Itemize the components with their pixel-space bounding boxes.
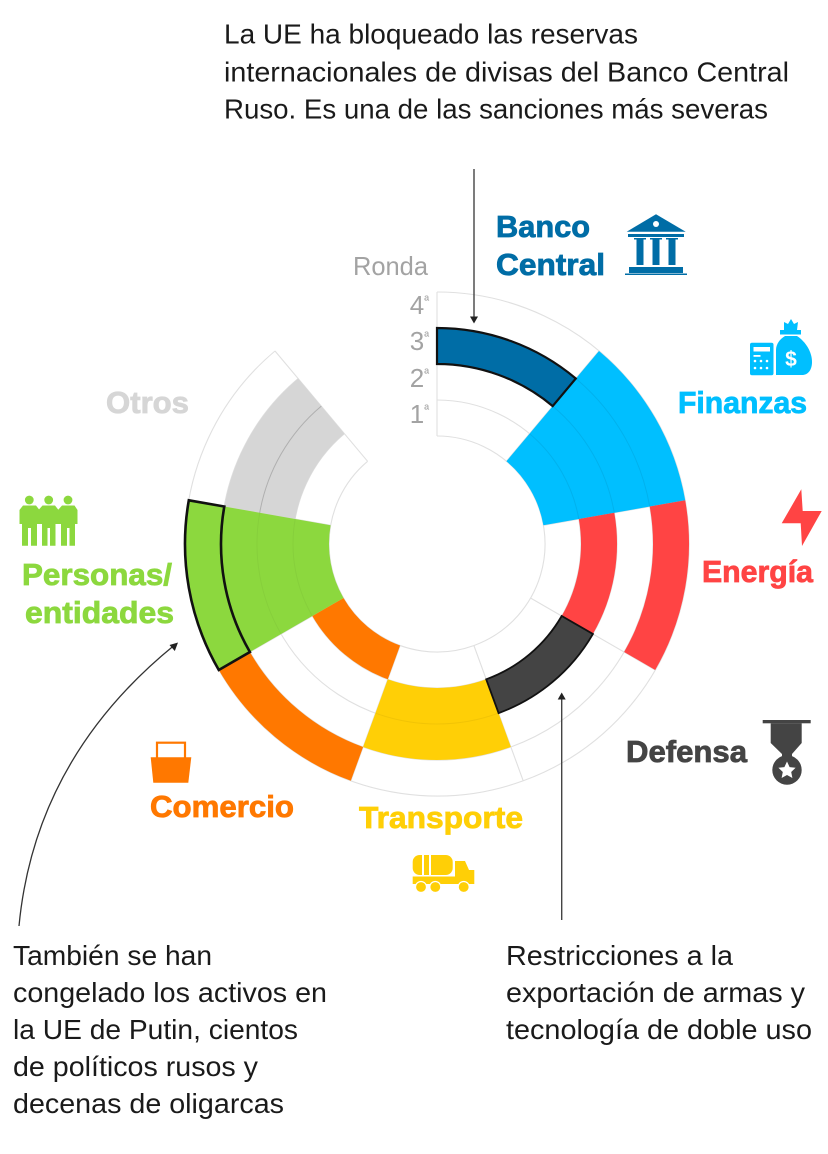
round labels: 4 — [410, 290, 424, 320]
text block: arms export note: exportación de armas y — [506, 977, 805, 1008]
icon: tanker truck — [413, 855, 474, 892]
sector: Personas, round 4 (highlighted) — [185, 500, 250, 670]
sector: Defensa, round 2 (highlighted) — [486, 616, 593, 713]
round labels: Ronda — [353, 251, 429, 281]
label: Banco Central: Banco — [496, 209, 590, 244]
icon: shopping basket — [151, 743, 191, 783]
label: Defensa: Defensa — [626, 734, 748, 769]
round labels: ª — [424, 402, 429, 417]
radial chart of sanctions — [185, 292, 689, 796]
sector: Comercio, round 4 — [219, 652, 363, 781]
text block: central bank note — [224, 18, 789, 124]
round labels — [353, 251, 429, 429]
sector: Personas, rounds 1-3 — [221, 506, 344, 652]
label: Personas / entidades: entidades — [25, 595, 174, 630]
icon: calculator and money bag — [750, 319, 812, 375]
text block: central bank note: Ruso. Es una de las sanciones más severas — [224, 94, 768, 124]
icon: three people — [20, 496, 78, 546]
sector: Energía, round 2 — [562, 513, 617, 634]
label: Energía: Energía — [702, 554, 814, 589]
label: Finanzas: Finanzas — [678, 385, 807, 420]
round labels: ª — [424, 293, 429, 308]
label: Transporte: Transporte — [359, 800, 523, 835]
text block: central bank note: internacionales de divisas del Banco Central — [224, 56, 789, 88]
round labels: 2 — [410, 363, 424, 393]
sector: Transporte, rounds 2-3 — [363, 679, 511, 760]
round labels: 1 — [410, 399, 424, 429]
icon: medal — [763, 720, 811, 785]
text block: central bank note: La UE ha bloqueado las reservas — [224, 18, 638, 50]
text block: assets frozen note: También se han — [13, 940, 212, 971]
text block: assets frozen note: decenas de oligarcas — [13, 1088, 284, 1119]
sector: Comercio, round 1 — [312, 598, 400, 679]
arrow: to persons sector — [19, 642, 178, 926]
grid rings and rays — [185, 292, 689, 796]
icon: lightning bolt — [782, 489, 822, 546]
text block: arms export note: Restricciones a la — [506, 940, 734, 971]
arrow: to defence sector — [558, 692, 566, 920]
text block: assets frozen note: congelado los activos en — [13, 977, 327, 1008]
sector: Banco Central, round 3 (highlighted) — [437, 328, 576, 406]
sector: Finanzas, rounds 1-4 — [506, 351, 685, 525]
text block: arms export note — [506, 940, 812, 1045]
sector: Energía, round 4 — [624, 500, 689, 670]
label: Banco Central — [496, 209, 605, 282]
round labels: ª — [424, 329, 429, 344]
icon: bank — [625, 214, 687, 275]
text block: assets frozen note — [13, 940, 327, 1119]
text block: assets frozen note: de políticos rusos y — [13, 1051, 258, 1082]
text block: arms export note: tecnología de doble uso — [506, 1014, 812, 1045]
label: Personas / entidades — [22, 557, 174, 630]
label: Banco Central: Central — [496, 247, 605, 282]
label: Comercio: Comercio — [150, 789, 294, 824]
text block: assets frozen note: la UE de Putin, cientos — [13, 1014, 298, 1045]
label: Personas / entidades: Personas/ — [22, 557, 172, 592]
arrow: to central bank sector — [470, 169, 478, 324]
ring lines over coloured sectors — [257, 378, 650, 724]
round labels: ª — [424, 366, 429, 381]
sector: Otros, rounds 2-3 — [224, 378, 344, 519]
icon: calculator and money bag: $ — [785, 348, 797, 371]
label: Otros: Otros — [106, 385, 189, 420]
round labels: 3 — [410, 326, 424, 356]
